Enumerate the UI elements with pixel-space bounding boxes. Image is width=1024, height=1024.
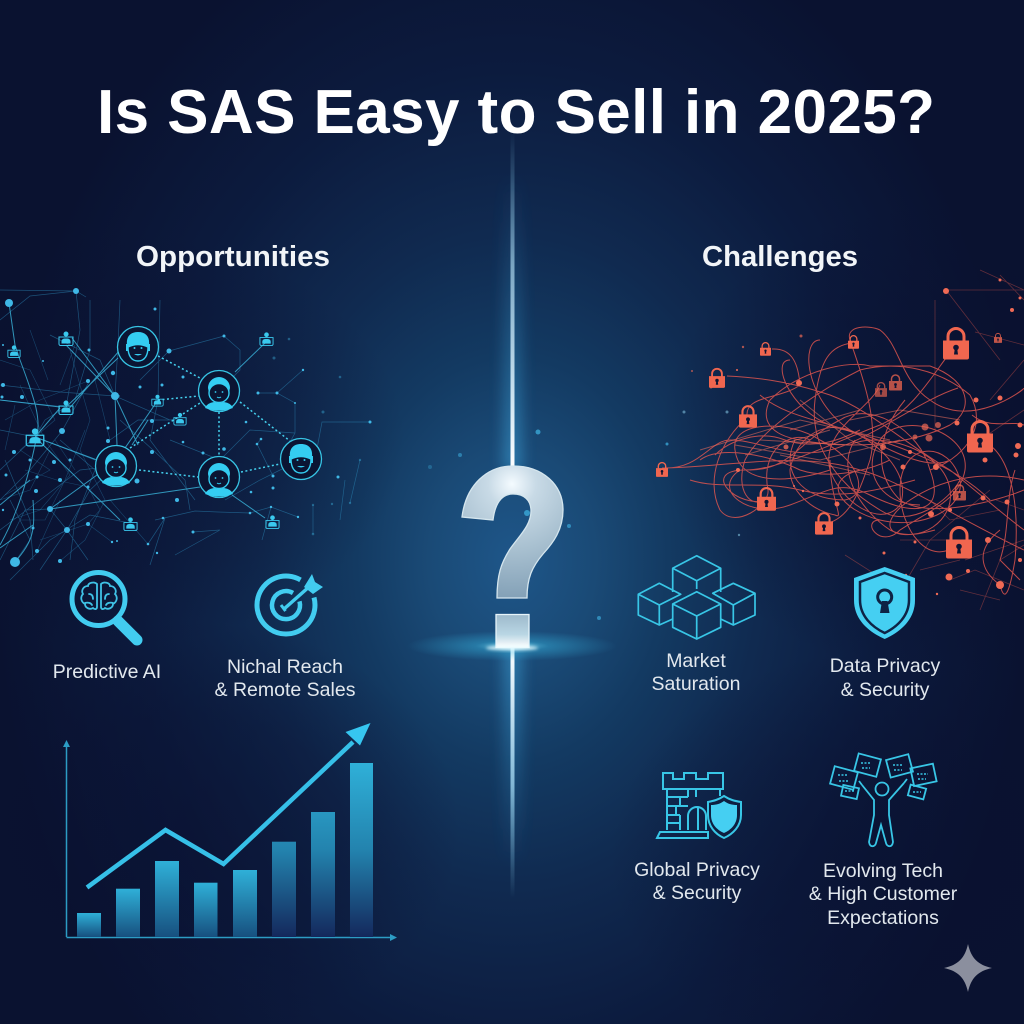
label: Nichal Reach	[215, 656, 356, 701]
trend arrow	[87, 723, 370, 888]
question mark	[407, 466, 617, 661]
label: Nichal Reach: & Remote Sales	[215, 679, 356, 701]
central light beam	[428, 130, 601, 898]
axes	[63, 740, 397, 941]
bars	[77, 763, 373, 937]
label: Global Privacy	[634, 859, 760, 904]
icon: data privacy shield	[854, 567, 915, 639]
label: Market Saturation	[652, 650, 740, 695]
label: Evolving Tech: & High Customer	[809, 883, 958, 905]
chart: growth bars	[63, 723, 397, 941]
label: Data Privacy: & Security	[841, 679, 930, 701]
heading: challenges: Challenges	[702, 241, 858, 273]
label: Market Saturation: Market	[666, 650, 726, 672]
lock icons	[656, 328, 1002, 558]
label: Nichal Reach: Nichal Reach	[227, 656, 343, 678]
icon: target with arrow	[257, 574, 323, 634]
dotted connectors	[130, 356, 290, 477]
label: Predictive AI: Predictive AI	[53, 661, 161, 683]
network: challenges	[656, 270, 1024, 610]
label: Global Privacy: Global Privacy	[634, 859, 760, 881]
icon: global privacy castle	[657, 773, 741, 838]
heading: opportunities: Opportunities	[136, 241, 330, 273]
label: Global Privacy: & Security	[653, 882, 742, 904]
label: Data Privacy: Data Privacy	[830, 655, 941, 677]
label: Market Saturation: Saturation	[652, 673, 740, 695]
icon: predictive AI magnifier	[72, 572, 137, 640]
network nodes	[0, 288, 372, 567]
icon: overwhelmed person with screens	[830, 753, 937, 846]
tangled curves	[662, 327, 1024, 594]
faint web lines	[0, 290, 370, 580]
watermark star	[944, 944, 992, 992]
icon: market saturation cubes	[638, 556, 755, 639]
person badges	[8, 332, 279, 531]
bright connector lines	[0, 303, 265, 562]
label: Data Privacy	[830, 655, 941, 701]
label: Evolving Tech: Evolving Tech	[823, 860, 943, 882]
faint blue dots	[666, 410, 740, 536]
red nodes	[691, 278, 1022, 595]
straight lines	[845, 270, 1024, 610]
title: Is SAS Easy to Sell in 2025?	[97, 78, 935, 147]
label: Evolving Tech	[809, 860, 958, 929]
label: Evolving Tech: Expectations	[827, 907, 939, 929]
network: opportunities	[0, 288, 372, 580]
person circles	[96, 326, 322, 498]
